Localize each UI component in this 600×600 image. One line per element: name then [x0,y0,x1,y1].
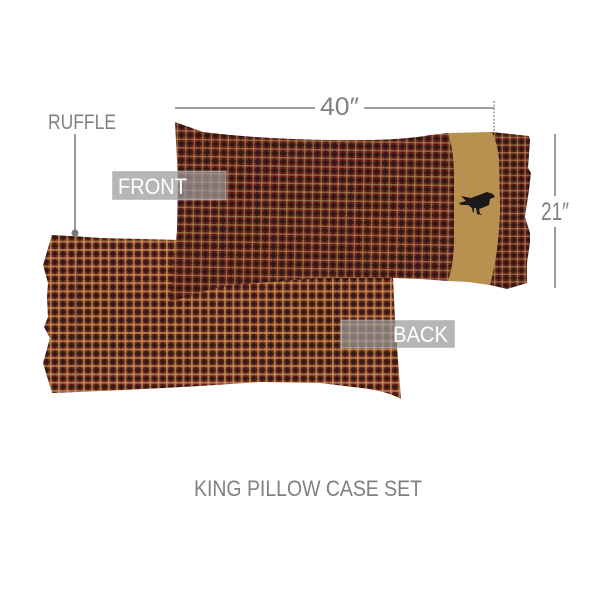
ruffle pointer [72,134,78,236]
label: ruffle [48,111,116,236]
front cuff band [448,132,500,285]
front pillow case [170,122,531,302]
label: front: FRONT [118,174,187,199]
label: back [341,320,455,348]
label: back: BACK [393,322,448,347]
label: front [112,171,226,200]
width dimension: 40 inches: 40″ [320,93,359,121]
ruffle seam [76,240,80,390]
label: ruffle: RUFFLE [48,111,116,134]
front ruffle [490,132,531,289]
back pillow case [43,235,401,399]
title: KING PILLOW CASE SET [194,476,422,501]
icon: crow [459,192,495,215]
height dimension: 21 inches: 21″ [541,198,569,226]
